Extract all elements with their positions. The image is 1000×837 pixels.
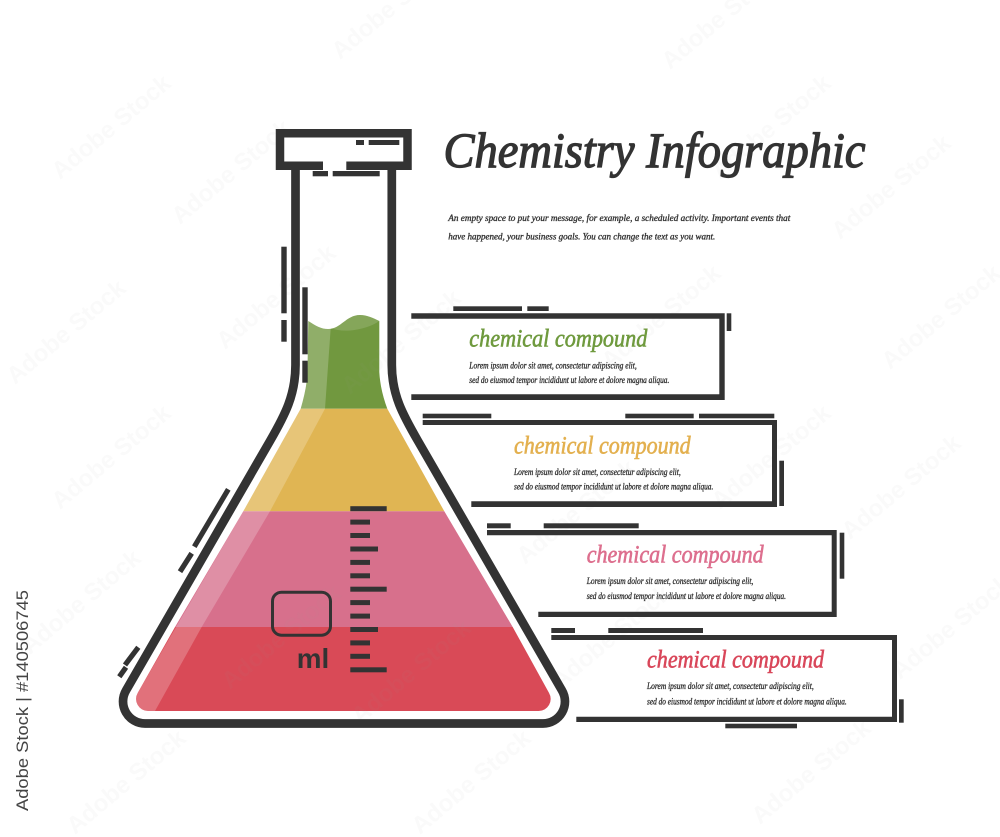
description: Lorem ipsum dolor sit amet, consectetur adipiscing elit, [646, 682, 814, 692]
panel dashes [551, 628, 904, 728]
intro text [447, 213, 791, 242]
description [586, 577, 786, 602]
watermark: Adobe Stock [597, 259, 727, 375]
description: sed do eiusmod tempor incididunt ut labore et dolore magna aliqua. [469, 376, 669, 386]
watermark: Adobe Stock [747, 714, 877, 830]
flask liquid layers [136, 315, 551, 711]
watermark: Adobe Stock [707, 399, 837, 515]
glass highlight [136, 321, 331, 711]
panel: green compound [411, 306, 731, 400]
description [646, 682, 847, 707]
description: sed do eiusmod tempor incididunt ut labore et dolore magna aliqua. [647, 697, 847, 707]
liquid: yellow layer [243, 409, 444, 511]
neck dashes [281, 247, 308, 383]
watermark: Adobe Stock [167, 114, 297, 230]
watermark: Adobe Stock [212, 239, 342, 355]
watermark: Adobe Stock [707, 69, 837, 185]
description: Lorem ipsum dolor sit amet, consectetur adipiscing elit, [586, 577, 753, 587]
liquid: green layer [301, 315, 387, 409]
description: sed do eiusmod tempor incididunt ut labore et dolore magna aliqua. [514, 483, 713, 493]
watermark: Adobe Stock [2, 274, 132, 390]
stock credit: Adobe Stock | #140506745 [13, 590, 32, 811]
title: Chemistry Infographic [444, 122, 866, 178]
description: Lorem ipsum dolor sit amet, consectetur adipiscing elit, [513, 468, 681, 478]
flask body outline [123, 166, 565, 724]
heading: chemical compound [469, 326, 648, 353]
panel dashes [487, 523, 844, 579]
flask outline [119, 133, 565, 724]
description [469, 361, 669, 386]
measurement scale [350, 506, 387, 672]
watermark: Adobe Stock [547, 579, 677, 695]
description: Lorem ipsum dolor sit amet, consectetur adipiscing elit, [469, 361, 637, 371]
panel frame [551, 635, 897, 722]
liquid: red layer [136, 627, 551, 711]
description [513, 468, 713, 493]
watermark: Adobe Stock [347, 614, 477, 730]
cap dashes [313, 140, 399, 176]
watermark: Adobe Stock [407, 724, 537, 837]
flask cap [280, 133, 408, 166]
heading: chemical compound [647, 647, 824, 674]
intro text: An empty space to put your message, for example, a scheduled activity. Important events that [447, 213, 791, 224]
watermark: Adobe Stock [17, 544, 147, 660]
watermark: Adobe Stock [47, 399, 177, 515]
panel frame [487, 530, 837, 617]
intro text: have happened, your business goals. You can change the text as you want. [448, 232, 715, 242]
description: sed do eiusmod tempor incididunt ut labore et dolore magna aliqua. [587, 592, 786, 602]
watermark: Adobe Stock [217, 579, 347, 695]
panel dashes [453, 306, 731, 331]
watermark: Adobe Stock [62, 724, 192, 837]
watermark: Adobe Stock [512, 454, 642, 570]
watermark: Adobe Stock [337, 284, 467, 400]
panel dashes [423, 414, 784, 506]
unit label ml: ml [297, 643, 329, 674]
slope dashes [119, 489, 228, 677]
panel: pink compound [487, 523, 844, 617]
watermark: Adobe Stock [837, 429, 967, 545]
panel frame [411, 313, 725, 400]
measurement window [272, 592, 330, 635]
panel: red compound [551, 628, 904, 728]
watermark: Adobe Stock [827, 129, 957, 245]
panel frame [423, 420, 777, 507]
panel: yellow compound [423, 414, 784, 507]
heading: chemical compound [514, 432, 691, 459]
liquid: pink layer [175, 511, 513, 627]
heading: chemical compound [587, 542, 764, 569]
watermark: Adobe Stock [47, 69, 177, 185]
